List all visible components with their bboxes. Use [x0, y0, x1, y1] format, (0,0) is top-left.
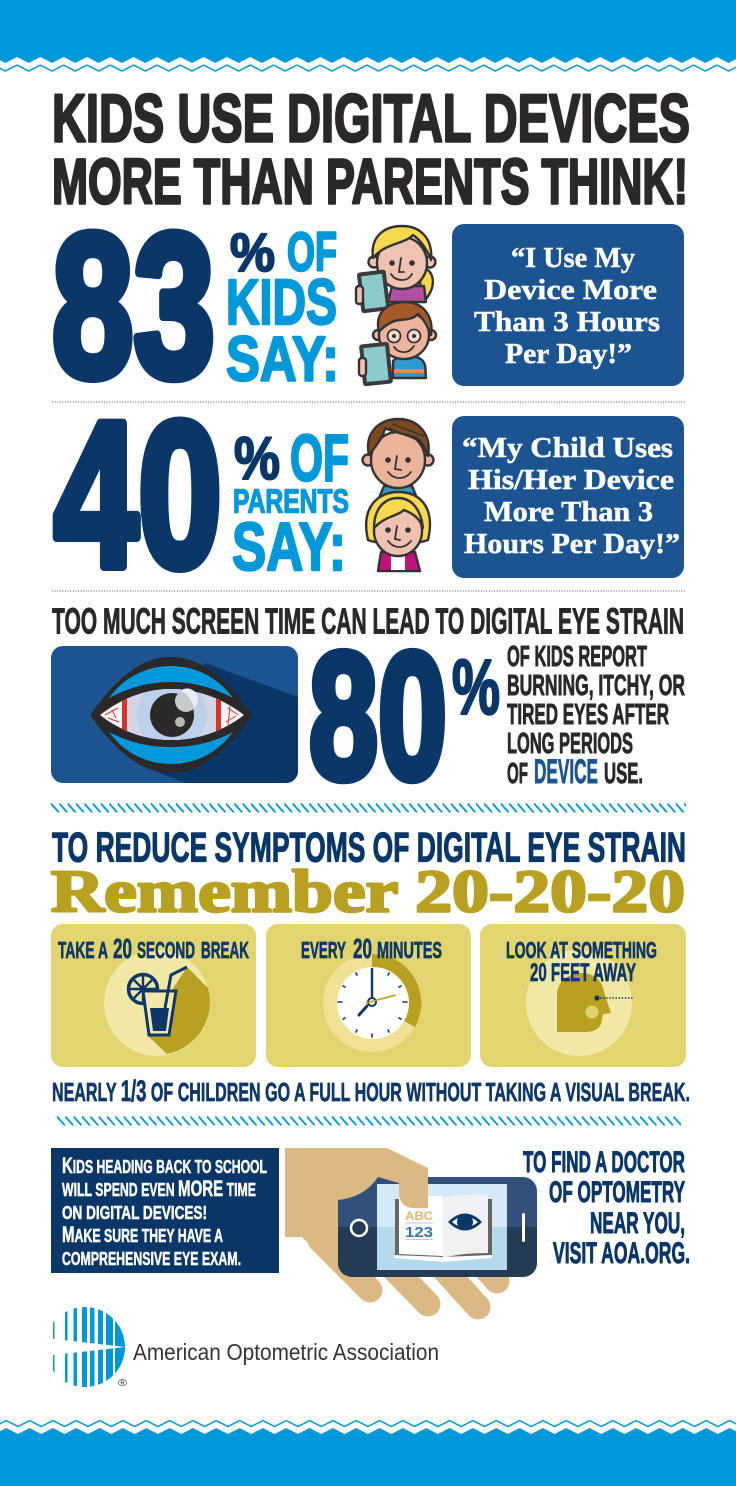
- icon: head profile with sight line: [557, 973, 633, 1032]
- label: 20 FEET AWAY: [530, 959, 636, 987]
- panel: kids quote: Per Day!”: [505, 338, 632, 370]
- label: percent of parents say: OF: [290, 420, 349, 494]
- text: eye strain statistic: OF: [507, 758, 528, 790]
- icon: drink with lemon: [128, 967, 210, 1054]
- panel: back to school: [51, 1148, 279, 1273]
- label: percent of kids say: OF: [287, 220, 337, 282]
- percent sign: %: [452, 643, 500, 731]
- panel: back to school: COMPREHENSIVE EYE EXAM.: [62, 1249, 241, 1269]
- icon: father: [362, 419, 434, 498]
- label: percent of parents say: PARENTS: [233, 482, 349, 520]
- card: every 20 minutes: [266, 924, 471, 1067]
- panel: kids quote: [452, 224, 684, 386]
- label: percent of kids say: SAY:: [226, 324, 339, 394]
- heading: remember 20-20-20: Remember 20-20-20: [51, 858, 685, 924]
- icon: hand holding phone: [285, 1148, 537, 1307]
- panel: kids quote: Device More: [484, 274, 657, 306]
- number 83: 83: [52, 192, 215, 420]
- number 40: 40: [54, 379, 222, 610]
- icon: boy with tablet and glasses: [359, 302, 436, 386]
- card: 20 second break: [51, 924, 256, 1067]
- label: BREAK: [201, 937, 249, 963]
- label: percent of parents say: %: [234, 425, 280, 492]
- label: percent of kids say: [226, 220, 339, 394]
- label: percent of parents say: SAY:: [232, 509, 346, 585]
- label: percent of parents say: [232, 420, 349, 585]
- stat: 40 percent of parents: [54, 379, 349, 610]
- number 80: 80: [309, 616, 447, 817]
- panel: kids quote: “I Use My: [511, 242, 635, 274]
- bottom banner: [0, 1410, 736, 1486]
- text: eye strain statistic: LONG PERIODS: [507, 728, 633, 760]
- panel: parents quote: More Than 3: [484, 496, 653, 528]
- label: EVERY: [301, 937, 346, 963]
- label: [301, 933, 442, 964]
- text: eye strain statistic: DEVICE: [534, 753, 598, 791]
- label: [506, 937, 657, 987]
- fingers: [320, 1240, 497, 1307]
- label: 20: [353, 933, 372, 964]
- label: 20: [113, 933, 132, 964]
- panel: back to school: ON DIGITAL DEVICES!: [62, 1203, 207, 1223]
- label: percent of kids say: %: [230, 223, 275, 283]
- stat: 83 percent of kids: [52, 192, 339, 420]
- panel: parents quote: His/Her Device: [468, 464, 674, 496]
- label: TAKE A: [58, 937, 108, 963]
- logo: American Optometric Association: [45, 1307, 439, 1389]
- open book with ABC 123 and eye: [394, 1195, 492, 1262]
- icon: clock hands and ticks: [338, 968, 407, 1037]
- text: eye strain statistic: [507, 641, 685, 791]
- open book with ABC 123 and eye: 123: [405, 1225, 433, 1241]
- panel: back to school: KIDS HEADING BACK TO SCHOOL: [62, 1153, 267, 1178]
- text: find a doctor: [523, 1146, 690, 1270]
- panel: kids quote: Than 3 Hours: [474, 306, 660, 338]
- panel: red eye illustration: [51, 646, 298, 783]
- text: eye strain statistic: USE.: [604, 758, 643, 790]
- panel: back to school: WILL SPEND EVEN MORE TIME: [62, 1176, 256, 1201]
- logo wordmark: American Optometric Association: [133, 1339, 439, 1365]
- logo mark: [45, 1307, 125, 1387]
- label: percent of kids say: KIDS: [226, 266, 337, 338]
- open book with ABC 123 and eye: ABC: [405, 1209, 433, 1223]
- label: MINUTES: [377, 937, 442, 963]
- panel: parents quote: “My Child Uses: [462, 432, 673, 464]
- title: [52, 81, 690, 218]
- panel: back to school: MAKE SURE THEY HAVE A: [62, 1222, 223, 1247]
- icon: mother: [366, 492, 430, 571]
- icon: girl with tablet: [356, 226, 436, 314]
- panel: parents quote: [452, 416, 684, 578]
- top banner: [0, 0, 736, 74]
- label: SECOND: [137, 937, 195, 963]
- phone: [338, 1177, 537, 1277]
- label: [58, 933, 249, 964]
- card: look 20 feet away: [480, 924, 686, 1067]
- stat: 80 percent: [309, 616, 500, 817]
- panel: parents quote: Hours Per Day!”: [464, 528, 680, 560]
- logo: American Optometric Association: ®: [118, 1378, 128, 1389]
- hand and thumb: [285, 1148, 428, 1273]
